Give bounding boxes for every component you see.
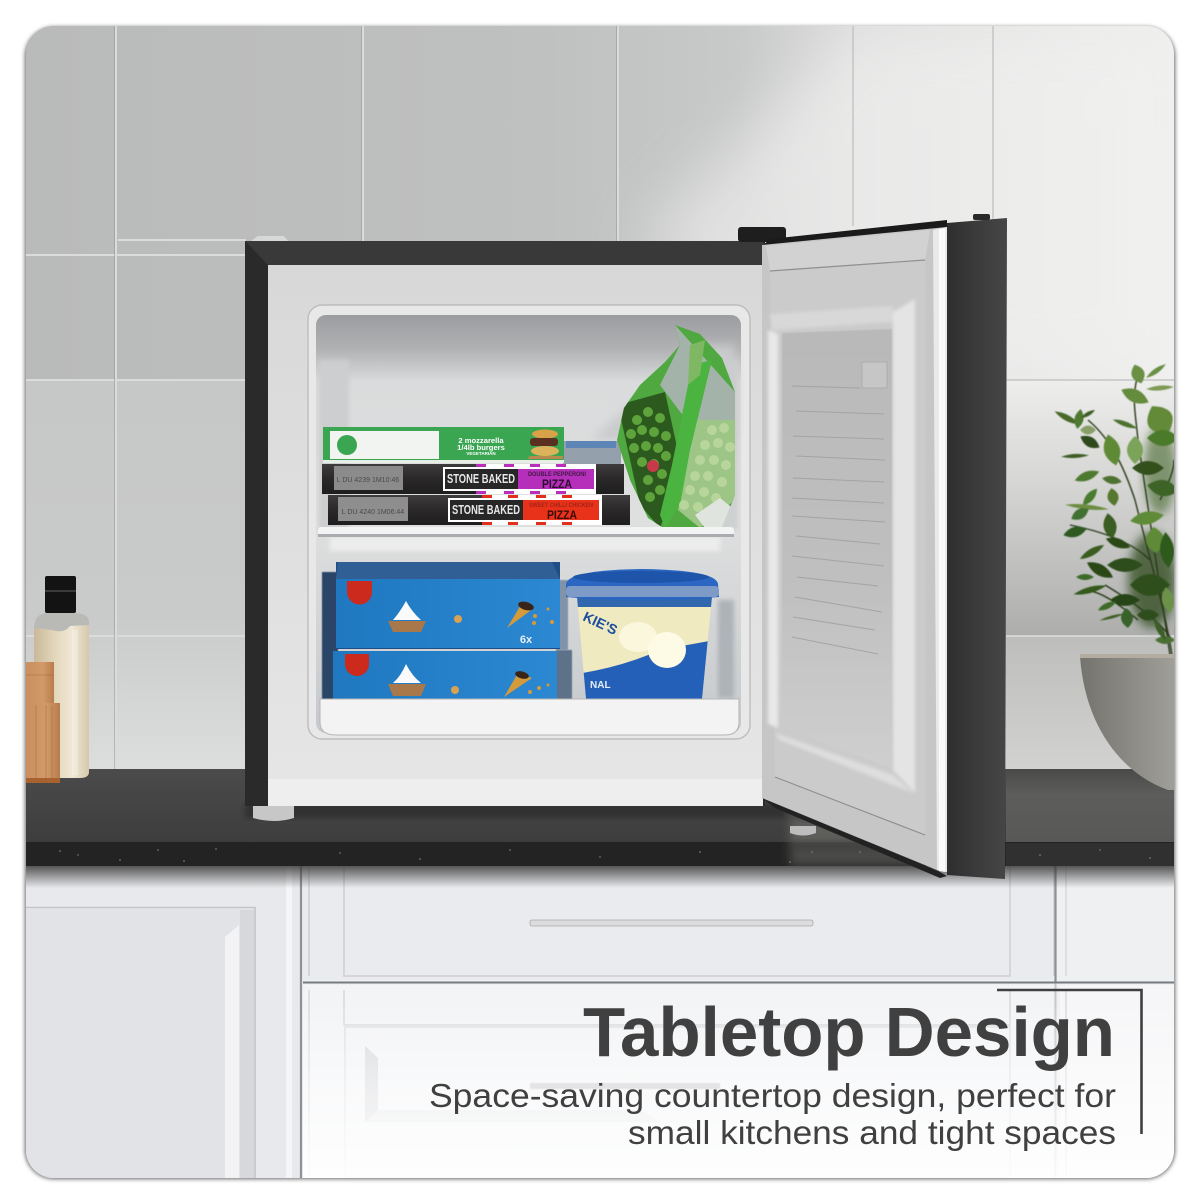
faint reflected handle: [530, 1083, 720, 1089]
countertop: [26, 769, 1174, 866]
description text: Space-saving countertop design, perfect for: [429, 1077, 1116, 1114]
pizza box: double pepperoni: L DU 4239 1M10:46: [337, 477, 399, 484]
frozen dessert box bottom: [333, 651, 557, 699]
freezer feet: [253, 806, 816, 836]
pizza box: sweet chilli chicken: STONE BAKED: [452, 502, 520, 517]
open door: [762, 214, 1007, 879]
bottle: [34, 576, 89, 778]
back blue box: [563, 441, 621, 465]
lower cabinet door: [308, 990, 1011, 1118]
frozen dessert box top: 6x: [520, 634, 533, 646]
pizza box: double pepperoni: DOUBLE PEPPERONI: [528, 471, 586, 478]
ice cream tub: [566, 569, 719, 699]
right cabinet: [1060, 866, 1174, 1178]
plant in bowl: [1053, 362, 1180, 790]
wire shelf: [318, 527, 734, 537]
white cabinets: [26, 866, 1174, 1178]
heading: Tabletop Design: Tabletop Design: [583, 993, 1115, 1071]
freezer liner: [268, 265, 763, 806]
burger box: [323, 427, 564, 463]
plant foliage: [1053, 362, 1180, 655]
cabinet drawer: [303, 866, 1054, 980]
door ribs: [792, 386, 885, 654]
pizza box: sweet chilli chicken: SWEET CHILLI CHICKEN: [529, 502, 593, 509]
door gasket: [933, 227, 947, 872]
description text: small kitchens and tight spaces: [628, 1114, 1116, 1151]
bowl: [1080, 656, 1174, 790]
freezer cavity: [308, 305, 750, 739]
frozen dessert box top: [336, 562, 560, 649]
frost band: [330, 537, 720, 551]
text bracket: [997, 990, 1142, 1134]
description text: [429, 1077, 1116, 1151]
pizza box: sweet chilli chicken: L DU 4240 1M06:44: [342, 509, 404, 516]
pizza box: sweet chilli chicken: PIZZA: [547, 508, 577, 522]
mini freezer: [245, 214, 1007, 879]
ice cream tub: NAL: [590, 680, 611, 691]
burger box: VEGETARIAN: [466, 451, 496, 456]
door exterior side: [947, 218, 1007, 879]
pizza box: double pepperoni: [322, 464, 624, 494]
top control: [738, 227, 786, 242]
pizza box: double pepperoni: STONE BAKED: [447, 471, 515, 486]
fridge shadow on counter: [245, 804, 785, 818]
door inner liner: [762, 227, 947, 872]
left cabinet door: [26, 906, 256, 1178]
door recess: [782, 329, 892, 656]
ice cream tub: KIE'S: [581, 608, 620, 638]
burger box: 2 mozzarella: [458, 436, 504, 445]
wooden grinder: [26, 662, 60, 783]
door raised frame: [768, 299, 915, 793]
burger box: 1/4lb burgers: [457, 443, 505, 452]
door bin tray: [320, 699, 739, 735]
freezer body: [245, 241, 765, 806]
tiled wall: [26, 26, 1174, 772]
frozen peas bag: [617, 325, 735, 527]
pizza box: sweet chilli chicken: [328, 495, 630, 525]
drawer handle: [530, 920, 813, 926]
door embossed badge: [862, 362, 887, 388]
pizza box: double pepperoni: PIZZA: [542, 477, 572, 491]
